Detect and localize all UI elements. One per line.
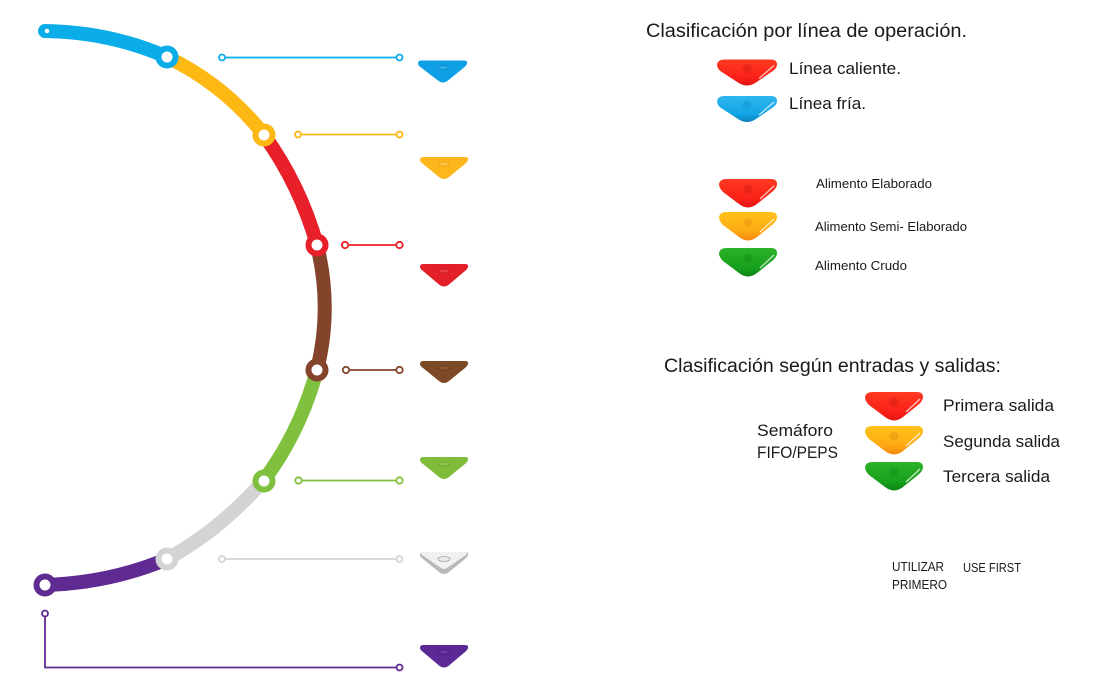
label: use first (Spanish): UTILIZAR <box>892 560 944 574</box>
flat pins column <box>418 60 468 668</box>
label: use first (Spanish): PRIMERO <box>892 578 947 592</box>
panel: line of operation <box>646 21 967 122</box>
arc segment: green <box>264 370 317 480</box>
node: red <box>308 236 326 254</box>
connector: green <box>295 477 403 484</box>
label: semi-elaborated food: Alimento Semi- Elaborado <box>815 220 967 234</box>
label: elaborated food: Alimento Elaborado <box>816 177 932 191</box>
connector: brown <box>343 367 403 373</box>
node: yellow <box>256 126 272 144</box>
glossy pin: orange <box>719 212 777 240</box>
pin: yellow <box>420 157 468 179</box>
arc segment: purple <box>45 559 167 585</box>
label: hot line: Línea caliente. <box>789 59 901 78</box>
node: blue start <box>43 27 51 35</box>
arc segment: brown <box>317 245 325 370</box>
node: gray <box>158 550 176 568</box>
connector: purple <box>42 610 402 670</box>
panel: food type <box>719 177 967 276</box>
arc segment: red <box>264 135 317 245</box>
pin: blue <box>418 60 467 82</box>
glossy pin: green <box>719 248 777 276</box>
glossy pin: red <box>717 60 777 86</box>
pin: green <box>420 457 468 479</box>
label: FIFO/PEPS traffic light: FIFO/PEPS <box>757 443 838 462</box>
label: first out: Primera salida <box>943 396 1055 415</box>
heading: inputs and outputs: Clasificación según entradas y salidas: <box>664 356 1001 377</box>
node: brown <box>308 362 326 378</box>
pin: brown <box>420 361 468 383</box>
glossy pin: orange <box>865 426 923 454</box>
arc segment: blue <box>45 31 167 57</box>
arc nodes <box>36 27 326 594</box>
label: third out: Tercera salida <box>943 467 1051 486</box>
node: green <box>256 472 272 490</box>
arc segment: yellow <box>167 57 264 135</box>
glossy pin: blue <box>717 96 777 122</box>
pin: purple <box>420 645 468 668</box>
connector: blue <box>219 54 402 60</box>
connector: red <box>342 242 403 248</box>
connector: yellow <box>295 132 402 138</box>
pin: gray <box>420 552 468 574</box>
node: purple end <box>36 576 54 594</box>
label: use first (English): USE FIRST <box>963 561 1021 575</box>
glossy pin: red <box>865 392 923 420</box>
pin: red <box>420 264 468 286</box>
label: second out: Segunda salida <box>943 432 1061 451</box>
glossy pin: green <box>865 462 923 490</box>
glossy pin: red <box>719 179 777 208</box>
label: raw food: Alimento Crudo <box>815 259 907 273</box>
heading: line of operation: Clasificación por línea de operación. <box>646 21 967 42</box>
label: FIFO/PEPS traffic light: Semáforo <box>757 421 833 440</box>
label: FIFO/PEPS traffic light <box>757 421 838 462</box>
arc segment: gray <box>167 480 264 559</box>
arc timeline <box>45 31 325 585</box>
label: cold line: Línea fría. <box>789 94 866 113</box>
connector lines <box>42 54 403 670</box>
node: blue <box>158 48 176 66</box>
label: use first (Spanish) <box>892 560 947 592</box>
panel: FIFO classification <box>664 356 1061 490</box>
connector: gray <box>219 556 402 562</box>
